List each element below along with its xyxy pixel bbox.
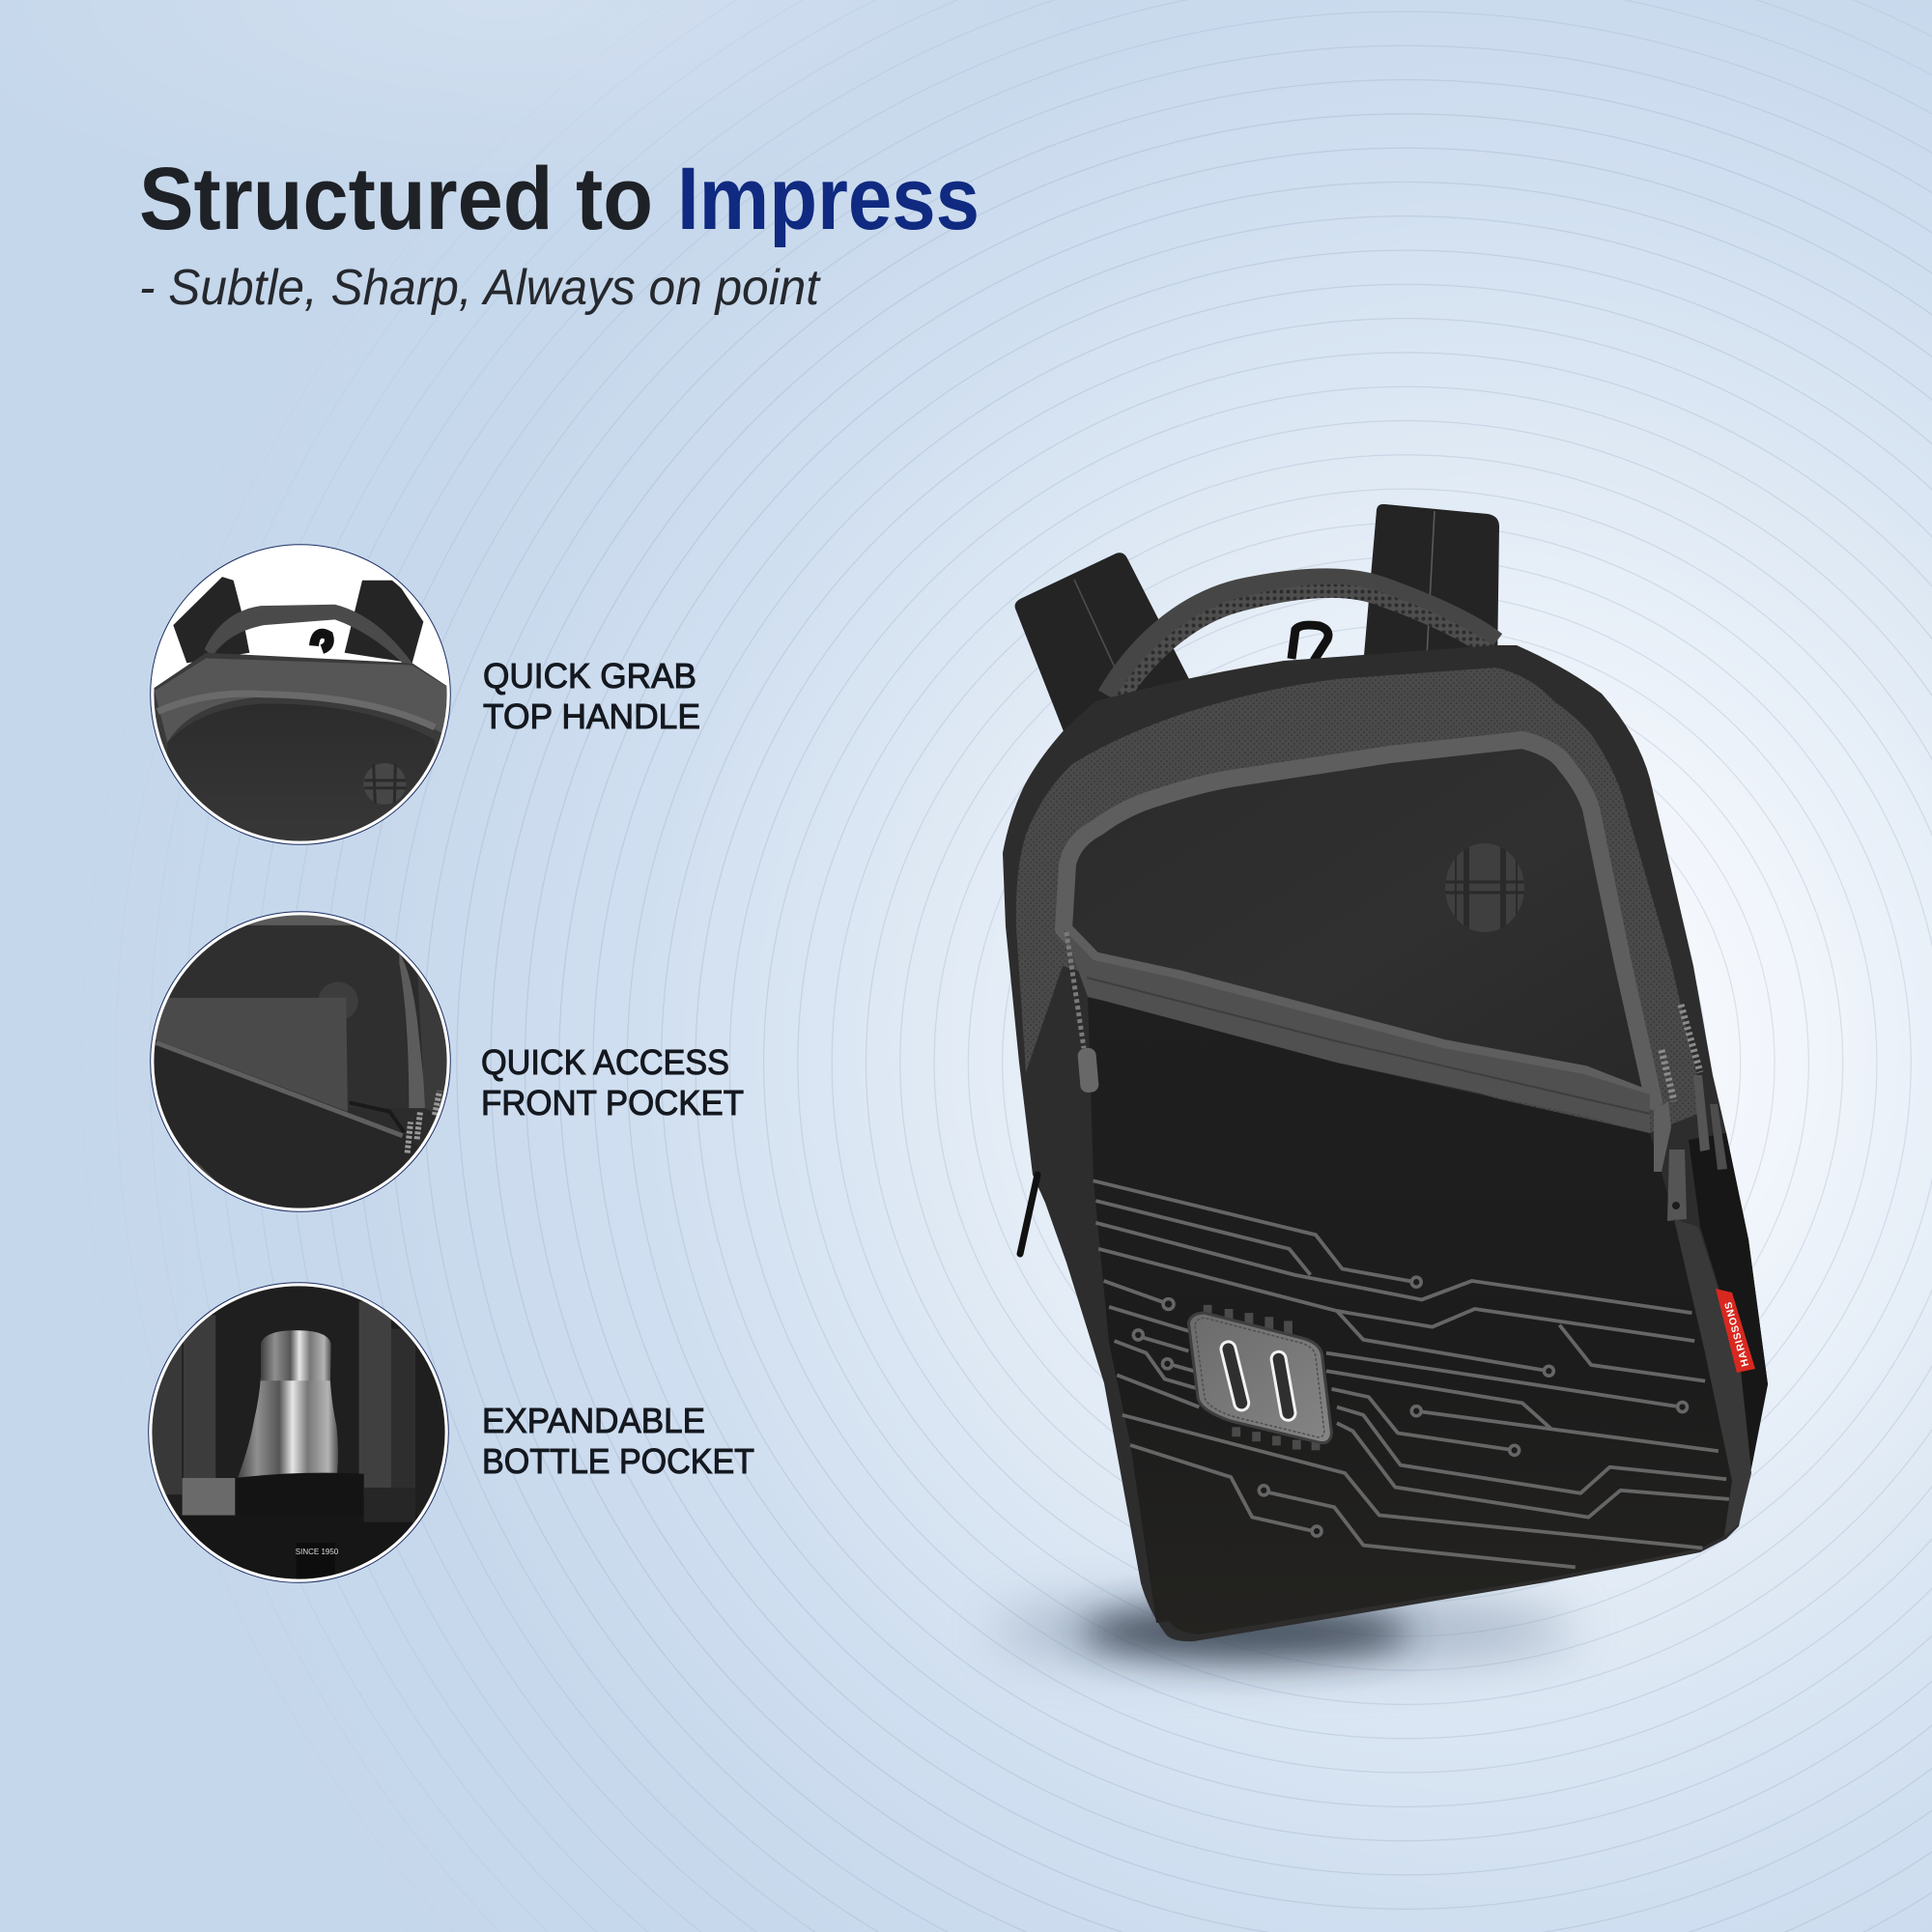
mesh rim — [1016, 668, 1705, 1140]
backpack — [1003, 504, 1768, 1641]
detail label: bottle pocket — [482, 1401, 754, 1481]
detail label: front pocket: QUICK ACCESS — [481, 1042, 729, 1082]
left zipper and pull — [1066, 932, 1099, 1094]
upper front panel — [1064, 740, 1654, 1101]
detail label: top handle: TOP HANDLE — [483, 696, 700, 736]
detail label: top handle — [483, 656, 700, 736]
zipper band — [1064, 929, 1650, 1133]
hanging loop — [1292, 625, 1328, 661]
chip patch — [1188, 1313, 1331, 1443]
detail thumbnail: bottle pocket — [145, 1280, 454, 1591]
side seam band — [1674, 1219, 1751, 1536]
title — [139, 150, 980, 248]
circuit print — [1094, 1180, 1729, 1567]
right zipper pulls — [1654, 1005, 1727, 1221]
title: Impress — [677, 150, 980, 248]
detail thumbnail: top handle — [145, 545, 454, 853]
top handle — [1111, 582, 1493, 701]
detail label: top handle: QUICK GRAB — [483, 656, 696, 696]
brand tag: HARISSONS — [1722, 1300, 1751, 1368]
body shell — [1003, 645, 1768, 1641]
side strap tail — [1020, 1175, 1037, 1254]
brand tag — [1716, 1289, 1755, 1373]
subtitle: - Subtle, Sharp, Always on point — [139, 260, 821, 316]
detail thumbnail: front pocket — [145, 908, 454, 1218]
detail label: bottle pocket: BOTTLE POCKET — [482, 1441, 754, 1481]
title: Structured to — [139, 150, 653, 248]
right shoulder strap — [1363, 504, 1499, 667]
tag text: SINCE 1950 — [296, 1548, 339, 1556]
detail label: front pocket: FRONT POCKET — [481, 1083, 744, 1122]
detail label: front pocket — [481, 1042, 744, 1122]
left shoulder strap — [1015, 553, 1190, 749]
logo emblem — [1445, 843, 1524, 932]
right side flap — [1689, 1133, 1768, 1468]
chip pins — [1204, 1305, 1320, 1450]
detail label: bottle pocket: EXPANDABLE — [482, 1401, 705, 1440]
ground shadow — [995, 1596, 1575, 1665]
lower front panel — [1088, 995, 1732, 1634]
